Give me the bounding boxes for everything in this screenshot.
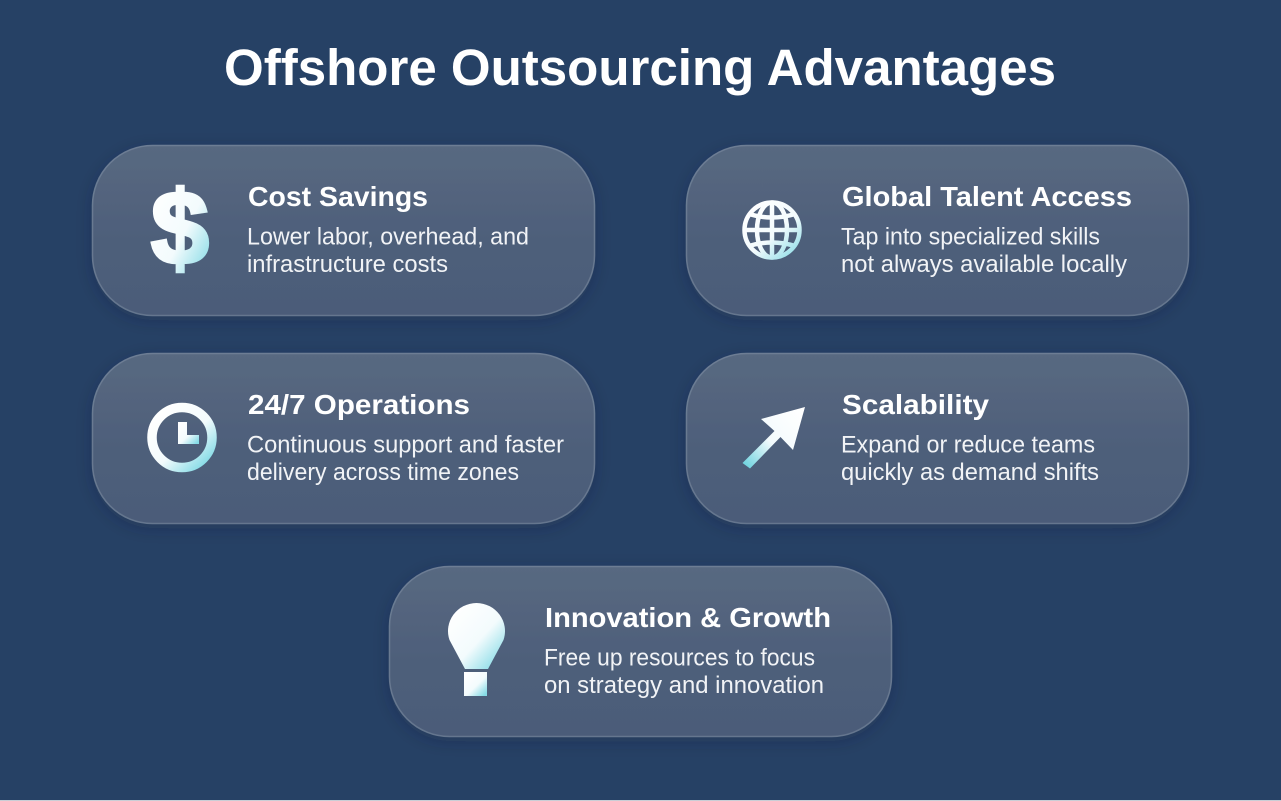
icon: diagonal arrow [742,407,805,468]
icon: clock [152,408,212,468]
panel: innovation and growth [390,566,892,736]
text: cost savings description: Lower labor, overhead, and [247,224,529,250]
heading: 24/7 operations: 24/7 Operations [248,389,470,420]
text: operations description: Continuous support and faster [247,432,564,458]
text: innovation description: on strategy and innovation [544,672,824,699]
heading: scalability: Scalability [842,389,989,420]
icon: dollar sign: $ [151,171,209,287]
panel: global talent access [686,146,1188,316]
panel: scalability [686,354,1188,524]
text: global talent description: Tap into specialized skills [841,224,1100,250]
panel: cost savings [92,146,594,316]
title: Offshore Outsourcing Advantages [224,39,1056,96]
icon: globe [744,202,800,258]
heading: innovation and growth: Innovation & Growth [545,602,831,633]
text: scalability description: quickly as demand shifts [841,459,1099,486]
heading: cost savings: Cost Savings [248,181,428,212]
text: scalability description: Expand or reduce teams [841,432,1095,458]
heading: global talent access: Global Talent Access [842,181,1132,212]
text: global talent description: not always available locally [841,251,1127,278]
text: operations description: delivery across time zones [247,459,519,486]
icon: light bulb [448,603,505,696]
text: cost savings description: infrastructure costs [247,251,448,278]
panel: 24/7 operations [92,354,594,524]
text: innovation description: Free up resources to focus [544,644,815,672]
